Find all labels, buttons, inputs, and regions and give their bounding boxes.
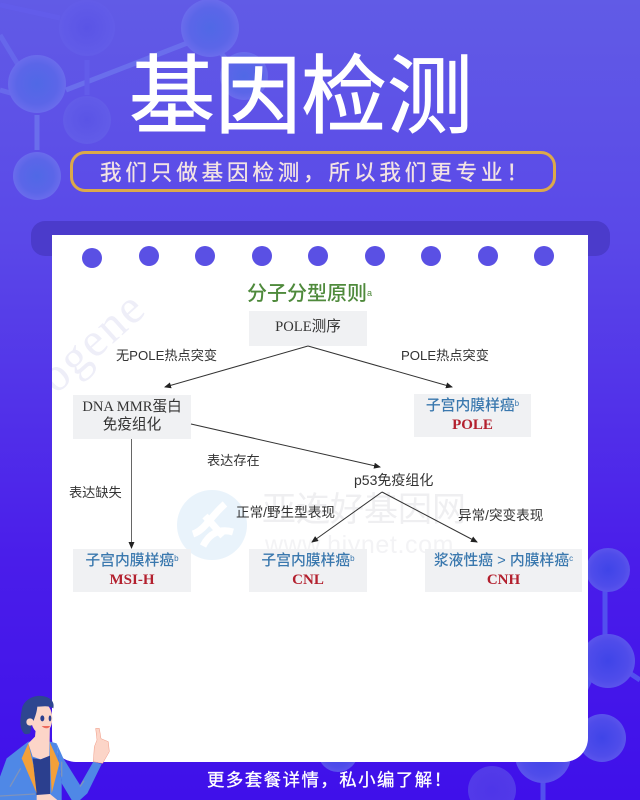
node: DNA MMR: [73, 395, 191, 439]
node: CNL result: CNL: [292, 572, 324, 588]
binder holes: [82, 246, 554, 268]
footer call to action: 更多套餐详情，私小编了解！: [207, 767, 453, 792]
icon: presenter illustration: [0, 696, 110, 800]
label: no POLE: 无POLE热点突变: [116, 348, 217, 363]
node: POLE result: 子宫内膜样癌b: [426, 398, 519, 414]
panel: white card: [52, 235, 588, 762]
node: POLE result: [414, 394, 531, 437]
label: POLE hotspot: POLE热点突变: [401, 348, 489, 363]
label: abnormal mutant: 异常/突变表现: [458, 508, 543, 523]
watermark: url: www.hiynet.com: [265, 531, 454, 559]
node: CNH result: CNH: [487, 572, 520, 588]
label: expression lost: 表达缺失: [69, 485, 122, 500]
node: CNH result: [425, 549, 582, 592]
dark binder bar: [31, 221, 610, 256]
slogan banner: 我们只做基因检测，所以我们更专业！: [100, 156, 532, 187]
node: DNA MMR: 免疫组化: [103, 417, 161, 433]
label: normal wild type: 正常/野生型表现: [236, 505, 335, 520]
title: 基因检测: [129, 26, 473, 151]
node: MSI-H result: [73, 549, 191, 592]
node: p53: p53免疫组化: [354, 472, 433, 488]
watermark: logo: [177, 490, 247, 560]
node: CNL result: [249, 549, 367, 592]
watermark: [177, 490, 466, 560]
node: POLE sequencing: [249, 311, 367, 346]
node: MSI-H result: 子宫内膜样癌b: [85, 553, 179, 569]
node: POLE sequencing: POLE测序: [275, 319, 341, 335]
node: POLE result: POLE: [452, 417, 493, 433]
chart heading: 分子分型原则a: [247, 283, 372, 305]
node: CNH result: 浆液性癌 > 内膜样癌c: [434, 553, 573, 569]
label: expression present: 表达存在: [207, 453, 260, 468]
node: DNA MMR: DNA MMR蛋白: [82, 399, 182, 415]
node: CNL result: 子宫内膜样癌b: [261, 553, 355, 569]
slogan banner: [70, 151, 556, 192]
node: MSI-H result: MSI-H: [110, 572, 154, 588]
watermark: site name: 亚连好基因网: [262, 491, 466, 529]
